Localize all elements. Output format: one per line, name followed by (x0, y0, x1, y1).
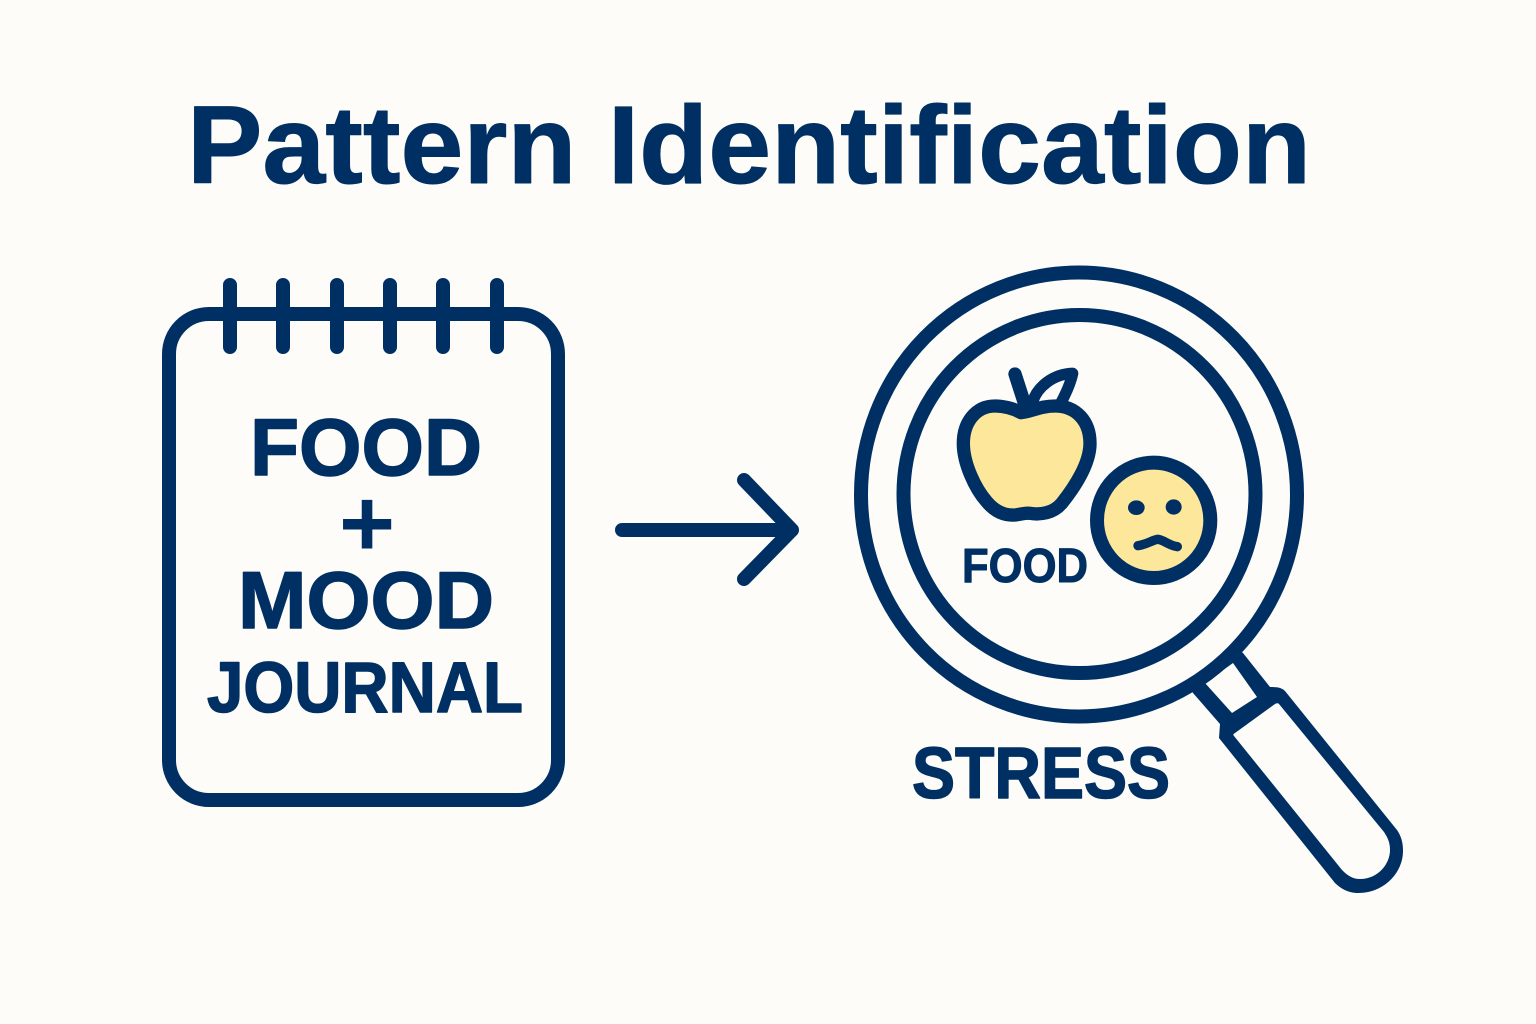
notepad body (169, 314, 558, 800)
outer lens ring (861, 272, 1297, 716)
notepad text (207, 403, 523, 728)
notepad text: MOOD (238, 556, 494, 646)
magnifier neck and handle (1190, 648, 1403, 893)
food and mood illustrations (963, 373, 1210, 578)
notepad text: FOOD (250, 403, 482, 493)
icon: sad face (1097, 463, 1210, 578)
notepad text: + (339, 470, 395, 577)
icon: apple (963, 373, 1090, 515)
icon: spiral notepad journal (169, 285, 558, 800)
title: Pattern Identification (187, 84, 1311, 207)
food label: FOOD (962, 540, 1088, 593)
notepad spiral rings (230, 285, 497, 347)
notepad text: JOURNAL (207, 649, 523, 728)
inner lens ring (904, 315, 1256, 673)
stress label: STRESS (912, 734, 1170, 814)
icon: magnifying glass (861, 272, 1403, 893)
arrow (622, 480, 792, 579)
